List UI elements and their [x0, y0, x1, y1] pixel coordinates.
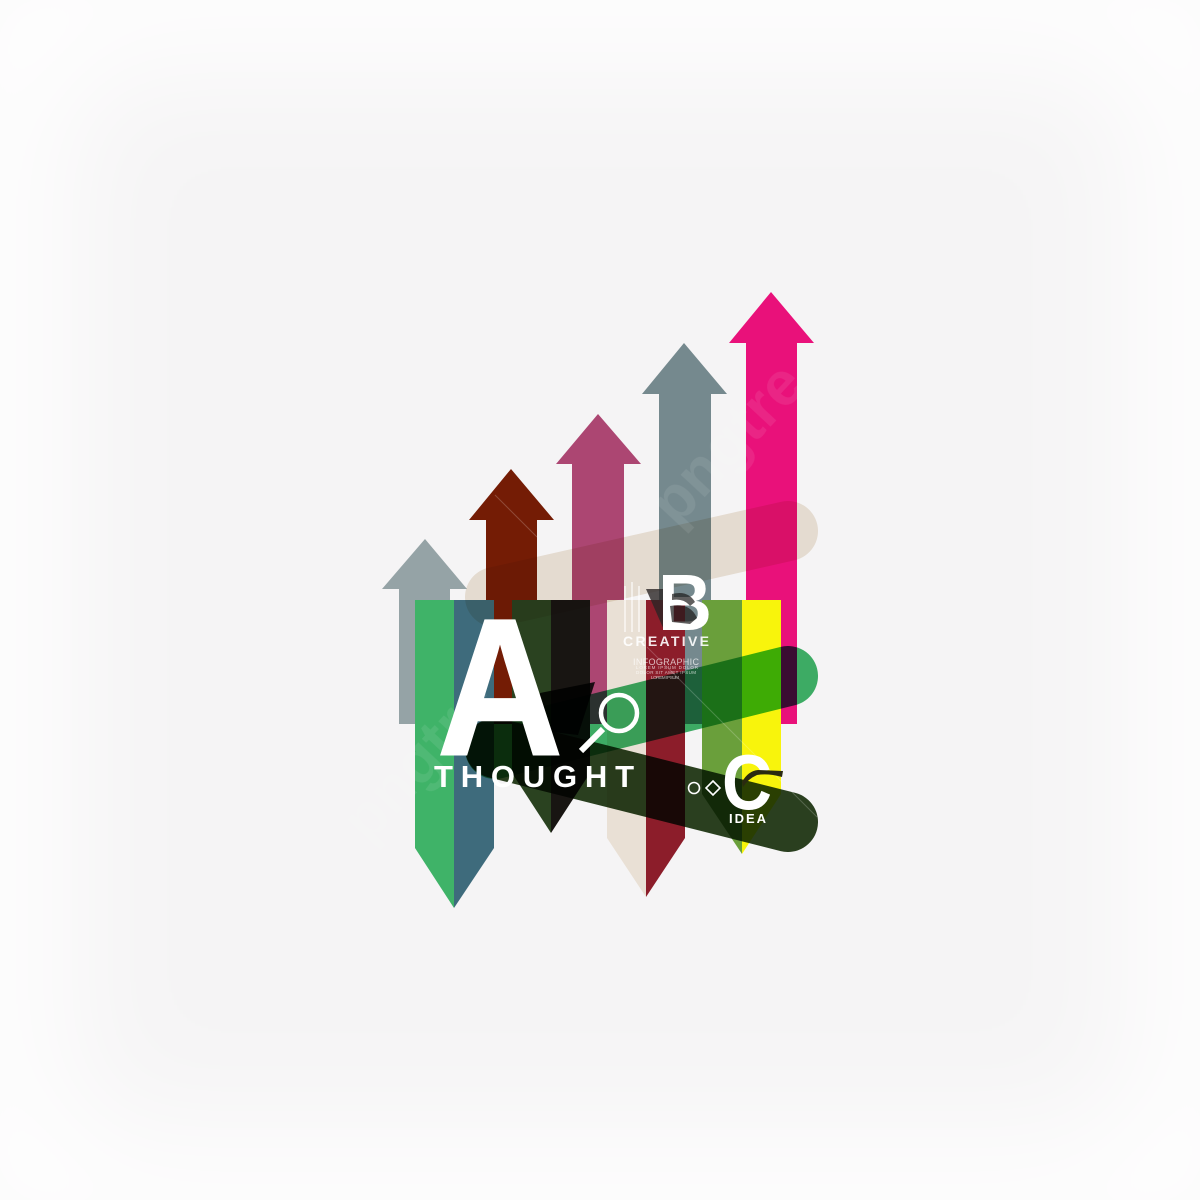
bar C: beige and crimson: [607, 600, 685, 897]
label IDEA: IDEA: [729, 811, 767, 826]
bar B: dark green and black: [512, 600, 590, 833]
arrow 2: maroon: [469, 469, 554, 724]
B counter shading: [670, 593, 697, 624]
watermark: pngtre: [636, 349, 818, 538]
label CREATIVE: CREATIVE: [623, 633, 709, 649]
pill: green: [495, 676, 788, 749]
arrow 3: mauve: [556, 414, 641, 724]
diagonal hairlines: [495, 495, 817, 817]
arrow 1: grey: [382, 539, 467, 724]
pill: beige: [495, 531, 788, 597]
letter C: C: [722, 738, 772, 826]
up arrows chart: [382, 292, 814, 724]
section B: letter and labels: [623, 558, 712, 680]
icon: vertical lines: [625, 582, 639, 632]
section A: letter and label: [434, 578, 634, 796]
down bars: [415, 600, 781, 908]
section C: letter and label: [688, 738, 783, 826]
small caption text: [636, 665, 699, 680]
arrow 5: magenta: [729, 292, 814, 724]
pill: dark green: [495, 748, 788, 822]
letter B: B: [658, 558, 712, 647]
letter A: A: [437, 578, 563, 796]
watermark: pngtre: [328, 666, 510, 855]
bar A: green and teal: [415, 600, 494, 908]
small caption text: LOREM IPSUM DOLOR: [636, 665, 699, 670]
small caption text: DOLOR SIT AMET IPSUM: [636, 670, 696, 675]
top wedge behind B: [646, 589, 664, 630]
small caption text: LOREM IPSUM: [651, 675, 679, 680]
label INFOGRAPHIC: INFOGRAPHIC: [633, 657, 700, 667]
label THOUGHT: THOUGHT: [434, 759, 634, 794]
icon: magnifier: [581, 695, 637, 751]
bar D: olive and yellow: [702, 600, 781, 854]
arrow 4: slate: [642, 343, 727, 724]
folded shadow wedge: [535, 682, 595, 735]
icon: circle and diamond: [688, 781, 720, 795]
watermark: [328, 349, 818, 855]
dark wedge over C: [742, 770, 783, 787]
